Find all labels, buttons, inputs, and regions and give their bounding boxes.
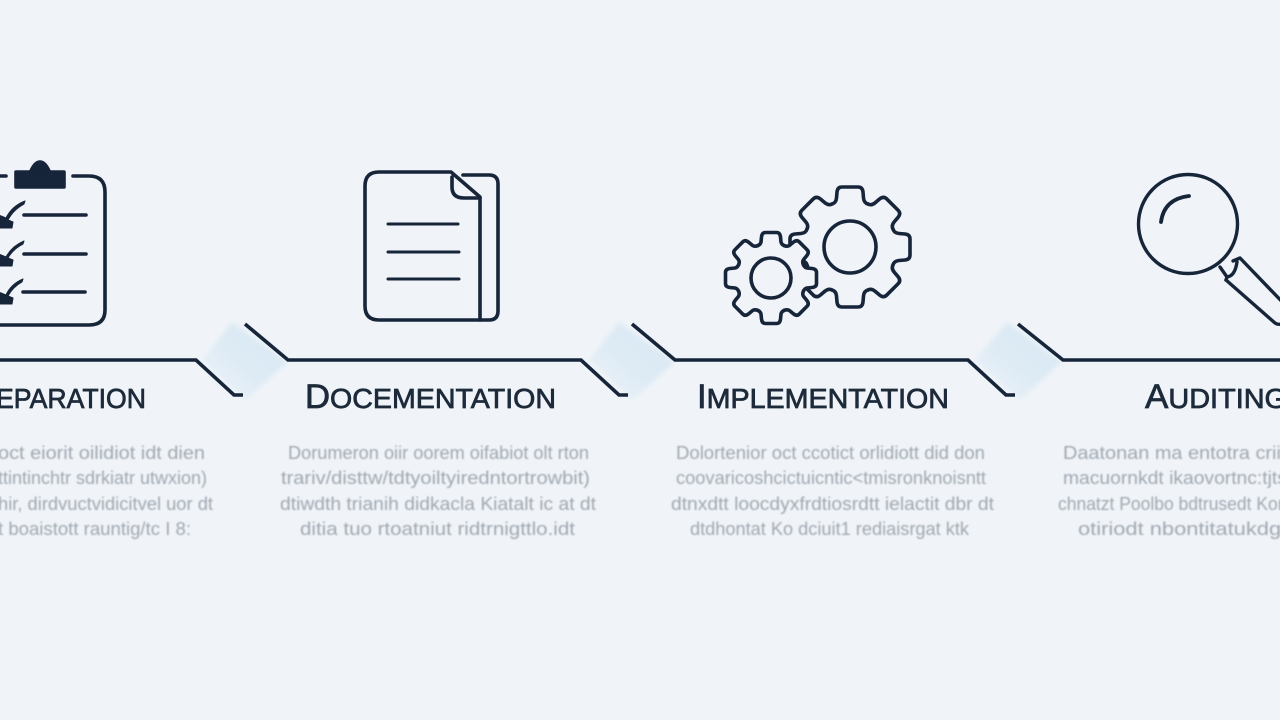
icon: clipboard checklist (0, 162, 105, 325)
large gear (790, 187, 910, 307)
panel: preparation (0, 162, 213, 539)
body text: preparation: t boaistott rauntig/tc I 8: (0, 519, 191, 539)
panel: documentation (280, 172, 596, 539)
panel: auditing (1058, 174, 1280, 539)
body text: preparation: hir, dirdvuctvidicitvel uor dt (0, 494, 213, 514)
heading: implementation: IMPLEMENTATION (697, 378, 949, 416)
heading: auditing: AUDITING (1145, 378, 1280, 416)
body text: implementation: Dolortenior oct ccotict orlidiott did don (676, 443, 985, 463)
body text: documentation: dtiwdth trianih didkacla Kiatalt ic at dt (280, 494, 596, 514)
body text: implementation: coovaricoshcictuicntic<tmisronknoisntt (676, 468, 986, 488)
body text: auditing: otiriodt nbontitatukdgitlt (1078, 519, 1280, 539)
body text: documentation: ditia tuo rtoatniut ridtrnigttlo.idt (300, 519, 575, 539)
body text: documentation: Dorumeron oiir oorem oifabiot olt rton (288, 443, 589, 463)
small gear (726, 232, 816, 324)
heading: documentation: DOCEMENTATION (305, 378, 556, 416)
icon: document (365, 172, 498, 320)
body text: implementation (671, 443, 994, 539)
body text: preparation (0, 443, 213, 539)
body text: preparation: ttintinchtr sdrkiatr utwxion) (0, 468, 207, 488)
body text: preparation: oct eiorit oilidiot idt dien (0, 443, 205, 463)
body text: documentation: trariv/disttw/tdtyoiltyiredntortrowbit) (281, 468, 590, 488)
body text: implementation: dtnxdtt loocdyxfrdtiosrdtt ielactit dbr dt (671, 494, 994, 514)
body text: auditing: Daatonan ma entotra criitot (1063, 443, 1280, 463)
body text: auditing (1058, 443, 1280, 539)
icon: magnifying glass (1138, 174, 1280, 324)
body text: implementation: dtdhontat Ko dciuit1 rediaisrgat ktk (690, 519, 970, 539)
timeline stepped line (0, 324, 1280, 395)
timeline connector bands (202, 322, 1062, 400)
icon: gears (726, 187, 910, 324)
body text: documentation (280, 443, 596, 539)
panel: implementation (671, 187, 994, 539)
